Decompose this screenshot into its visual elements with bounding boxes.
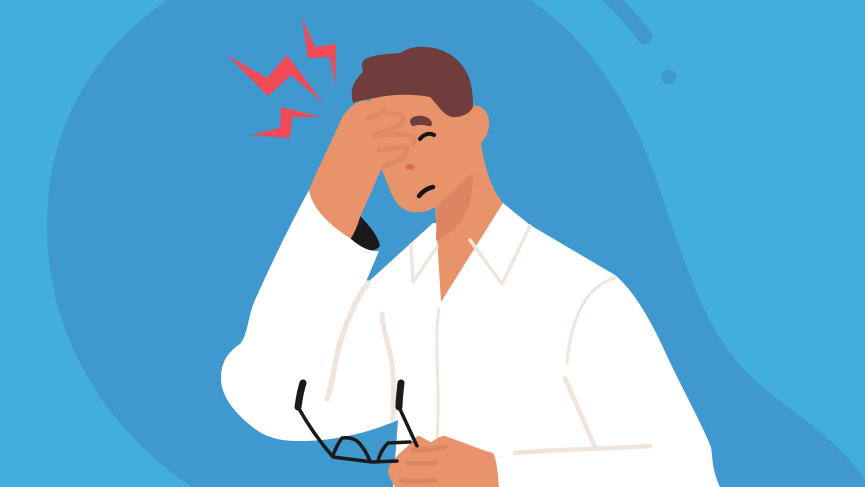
ear [468,105,489,144]
neck shadow [436,173,473,241]
right temple tip [399,383,401,407]
shirt body [367,203,720,487]
upper arm sleeve [221,190,402,441]
fingers on forehead [368,110,414,167]
lower sleeve crease [565,378,595,447]
left lens rim [333,438,370,461]
decorative dot [662,70,676,84]
decorative stroke [608,0,645,37]
neck [435,130,503,302]
right temple [399,407,417,446]
finger three [379,147,407,167]
finger one [368,110,385,118]
raised hand and forearm [309,101,417,240]
left temple tip [298,383,303,407]
finger line two [407,460,435,466]
cuff crease [515,446,650,453]
shoulder crease [567,278,615,363]
temples and bottom rim [298,407,397,462]
nose [406,164,414,170]
body crease [382,314,393,420]
sleeve cuff [350,216,380,250]
sleeve crease [327,283,368,399]
face [370,90,481,212]
glasses [298,383,417,462]
lightning bolts: pain [227,18,336,138]
eye [420,134,434,139]
bolt bottom [250,107,321,138]
eyebrow [410,116,432,126]
mouth [419,187,433,196]
shirt creases [327,226,650,453]
right lens rim [378,442,410,461]
lower hand holding glasses [388,436,499,487]
placket [437,309,439,438]
finger line one [413,447,445,450]
finger two [374,134,414,144]
finger line three [401,480,435,481]
bolt left [227,55,323,103]
collar right [470,226,530,284]
finger one curl [374,113,403,136]
bolt top [302,18,336,86]
finger lines [401,447,445,481]
collar left [411,245,437,282]
hair [352,47,473,117]
